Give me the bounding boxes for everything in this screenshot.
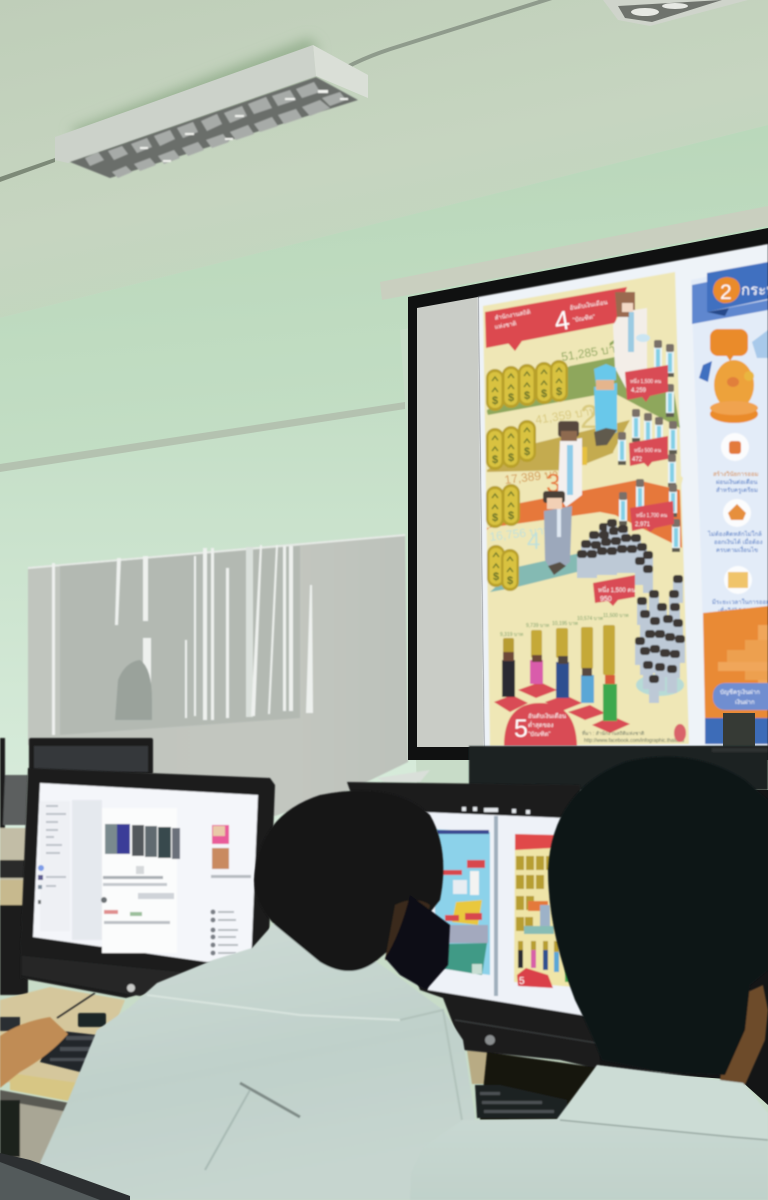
desks and under-desk: [0, 987, 490, 1165]
heading banner: 4: [552, 305, 572, 337]
salary labels: 4: [527, 528, 540, 555]
text block with icons: ผ่อนเงินต่อเดือน: [716, 478, 757, 486]
neck skin: [720, 985, 768, 1085]
footer bar: [705, 718, 768, 744]
red tags: หนึ่ง 1,500 คน: [630, 378, 662, 385]
mask: [385, 895, 450, 990]
salary labels: [489, 332, 627, 555]
scattered crowd: [635, 575, 685, 703]
person 2: blue scrubs: [594, 364, 617, 446]
red tags: หนึ่ง 500 คน: [634, 447, 662, 454]
text block with icons: เพื่อให้ได้เงินครบ: [718, 607, 762, 615]
whiteboard with window reflection: [28, 534, 430, 816]
salary labels: 51,285 บาท: [560, 340, 624, 364]
coin tower figures: [494, 613, 630, 733]
taskbar icons: [462, 807, 530, 814]
text block with icons: สำหรับครูเตรียม: [716, 486, 758, 494]
monitor bezel: [347, 782, 603, 1070]
end cap: [313, 45, 368, 98]
coin tower figures: 10,195 บาท: [552, 621, 578, 627]
heading banner: แห่งชาติ: [494, 320, 517, 331]
text block with icons: สร้างวินัยการออม: [713, 471, 759, 478]
salary labels: 3: [546, 468, 560, 498]
panel header: [692, 262, 768, 324]
crowd block: [577, 519, 653, 593]
person 4: grey suit: [543, 491, 572, 575]
student: middle: [40, 790, 478, 1200]
salary labels: 2: [580, 398, 598, 435]
grate: [70, 77, 358, 178]
student: right: [410, 756, 768, 1200]
screen: [422, 812, 593, 1017]
text block with icons: [707, 433, 768, 615]
row 4 teal band: [490, 553, 580, 592]
heading banner: สำนักงานสถิติ: [494, 309, 531, 322]
monitor: left with social feed: [20, 768, 275, 998]
coin tower figures: 9,319 บาท: [500, 632, 523, 638]
blue pill call to action: บัญชีครูเงินฝาก: [720, 688, 760, 696]
heading banner: อันดับเงินเดือน: [569, 298, 608, 312]
ceiling light fixtures and pipe: [0, 0, 748, 182]
salary labels: 16,756 บาท: [489, 522, 552, 544]
icon: piggy bank: [699, 329, 758, 423]
red tags: 2,971: [635, 522, 651, 528]
coin stacks: [486, 360, 568, 591]
back row monitors: [0, 738, 768, 995]
paper on rail: [377, 770, 430, 782]
panel: salary infographic: [483, 272, 689, 746]
heading banner: [485, 287, 627, 351]
monitor: centre with infographic on screen: [347, 782, 603, 1120]
text block with icons: ครบตามเงื่อนไข: [716, 546, 758, 554]
coin tower figures: 9,739 บาท: [526, 623, 549, 629]
screen black frame: [408, 228, 768, 760]
dark object in front of the screen: [723, 713, 755, 749]
callout: rank 5: [504, 703, 577, 746]
student left at keyboard: hand: [0, 993, 106, 1088]
projected infographic: [478, 244, 768, 748]
page: left with teal chart: [432, 829, 490, 975]
callout: rank 5: "บัณฑิต": [528, 731, 551, 738]
callout: rank 5: 5: [514, 715, 528, 743]
blue pill call to action: [713, 683, 768, 710]
person 1: white coat doctor: [613, 292, 650, 392]
left nav: [38, 805, 66, 904]
monitor bezel: [20, 768, 275, 998]
page: right with salary infographic: 5: [519, 976, 525, 987]
shirt: [410, 1065, 768, 1200]
orange savings panel: [703, 606, 768, 718]
front face: [55, 45, 316, 163]
source credit: http://www.facebook.com/infographic.thailand: [584, 738, 685, 744]
page: right with salary infographic: [514, 834, 586, 988]
heading banner: "บัณฑิต": [572, 314, 596, 324]
blue decoration: [752, 330, 768, 358]
right dark monitor: [590, 790, 768, 1105]
source credit: [582, 724, 686, 744]
shirt: [40, 922, 478, 1200]
screen housing: [380, 206, 768, 300]
coin tower figures: 10,574 บาท: [577, 616, 603, 622]
salary labels: 41,359 บาท: [534, 403, 598, 427]
callout: rank 5: อันดับเงินเดือน: [528, 712, 566, 720]
monitor screen: [33, 783, 258, 965]
coin tower figures: 11,500 บาท: [603, 613, 629, 619]
salary labels: 1: [606, 332, 627, 374]
panel header: 2: [720, 281, 732, 304]
hair: [548, 756, 768, 1075]
sponsor column: [210, 825, 251, 956]
shirt folds: [147, 995, 462, 1170]
person 3: dark skinned doctor: [558, 421, 587, 507]
blank screen margin: [417, 297, 484, 747]
text block with icons: ไม่ต้องคิดหลักไม่ใกล้: [707, 530, 762, 538]
salary labels: 17,389 บาท: [504, 465, 567, 487]
hair: [254, 790, 443, 971]
foreground dark object: [0, 1153, 130, 1200]
mini graduates: [618, 340, 680, 552]
source credit: ที่มา : สำนักงานสถิติแห่งชาติ: [582, 730, 644, 737]
feed column: [40, 800, 180, 953]
red tags: หนึ่ง 1,700 คน: [636, 512, 668, 519]
keyboard: [475, 1085, 567, 1118]
HP logo: [485, 1035, 495, 1045]
red tags: 4,259: [631, 388, 647, 394]
callout: rank 5: ต่ำสุดของ: [528, 721, 554, 729]
panel: saving infographic: [691, 262, 768, 746]
collar: [557, 1065, 768, 1140]
text block with icons: ออกเงินได้ เมื่อต้อง: [714, 538, 763, 546]
row 3 orange band: [487, 480, 682, 548]
red tags: 472: [632, 457, 643, 463]
row 2 ochre band: [487, 420, 630, 472]
row 1 green band: [487, 352, 680, 428]
reflected figure: [115, 660, 152, 720]
projection screen: [380, 206, 768, 760]
ear and skin: [385, 900, 430, 960]
blue pill call to action: เงินฝาก: [735, 699, 755, 706]
under-monitor shadow: [480, 1052, 600, 1120]
red tags: หนึ่ง 1,500 คน: [598, 586, 635, 594]
red tags: 950: [600, 596, 612, 603]
red tags: [593, 365, 674, 606]
